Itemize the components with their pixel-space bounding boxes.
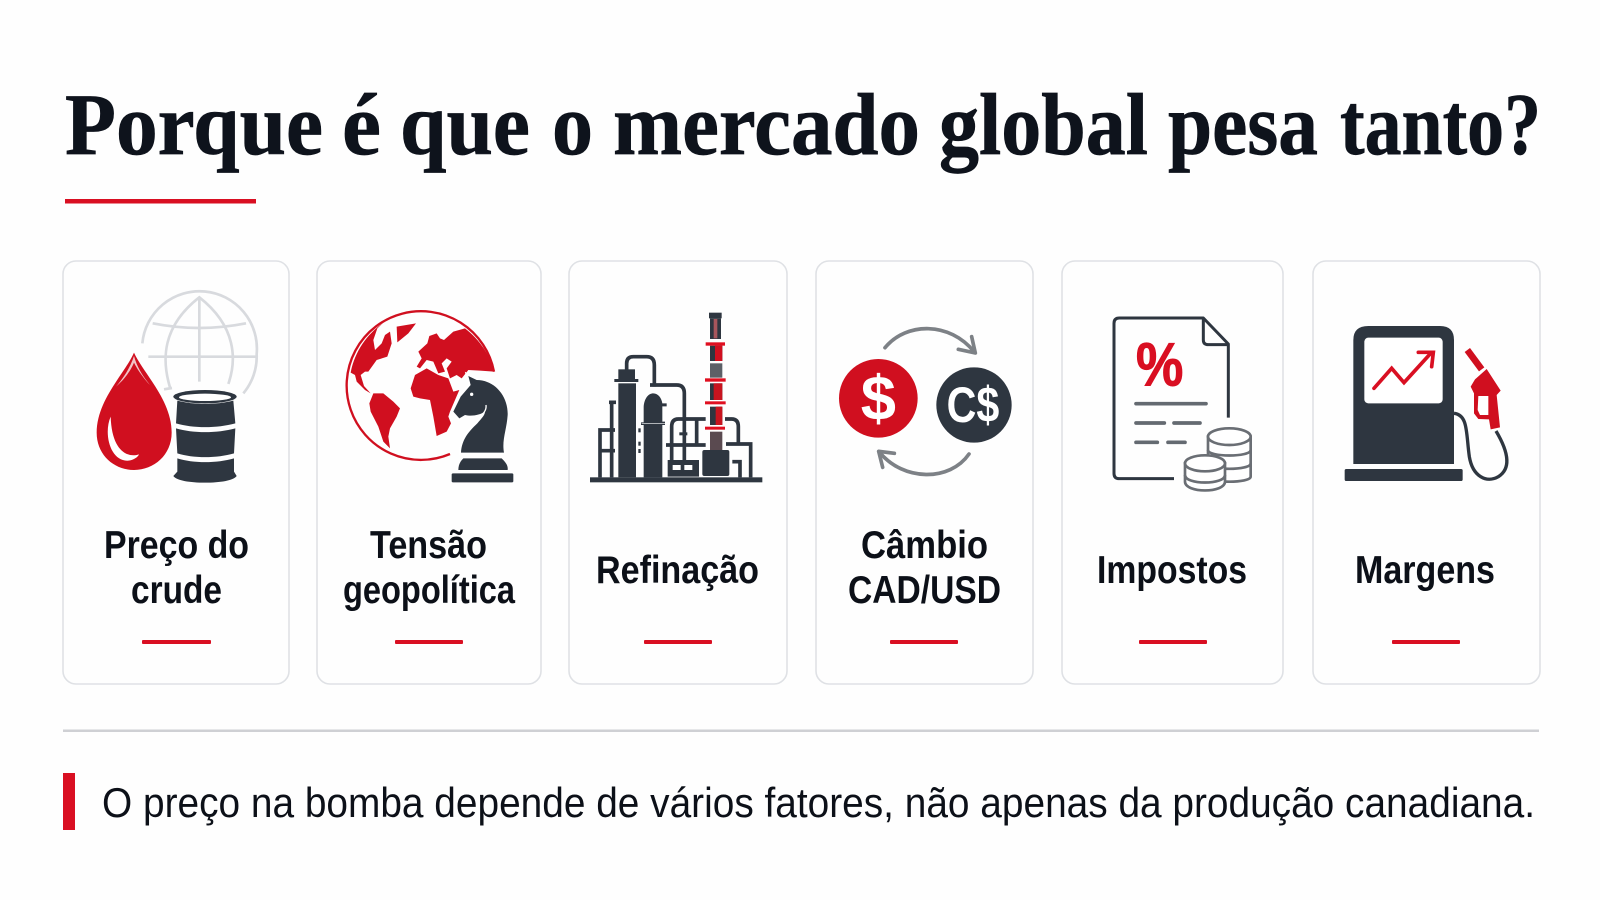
accent dash [395, 640, 463, 644]
title: pesa [1168, 77, 1318, 174]
panel: Impostos [1062, 261, 1283, 684]
panel: Preço do crude [63, 261, 289, 684]
title underline [65, 199, 256, 204]
icon: currency exchange [839, 329, 1012, 475]
panel: Tensão geopolítica [317, 261, 541, 684]
label: Impostos [1097, 549, 1247, 592]
icon: refinery [590, 313, 762, 482]
label: geopolítica [343, 569, 515, 612]
panel: Câmbio CAD/USD [816, 261, 1033, 684]
accent dash [1139, 640, 1207, 644]
label: crude [131, 569, 222, 612]
callout accent bar [63, 773, 75, 830]
panel: Margens [1313, 261, 1540, 684]
label [848, 524, 1001, 612]
label: Câmbio [861, 524, 988, 567]
accent dash [1392, 640, 1460, 644]
title: global [939, 77, 1148, 174]
icon: fuel pump with rising chart [1345, 326, 1507, 481]
title: mercado [613, 77, 920, 174]
divider [63, 730, 1539, 732]
title: tanto? [1340, 77, 1541, 174]
title: que [400, 77, 530, 174]
label: Tensão [370, 524, 487, 567]
title: Porque [65, 77, 323, 174]
title [65, 77, 1541, 174]
icon: world map and chess knight [347, 311, 513, 482]
icon: tax document and coins: % [1136, 331, 1183, 400]
panel: Refinação [569, 261, 787, 684]
accent dash [890, 640, 958, 644]
label [104, 524, 249, 612]
icon: oil drop, barrel and globe [97, 291, 257, 483]
icon: tax document and coins [1114, 318, 1251, 490]
label: Margens [1355, 549, 1495, 592]
title: é [342, 77, 381, 174]
icon: currency exchange: $ [861, 364, 896, 434]
title: o [552, 77, 593, 174]
label: Refinação [596, 549, 759, 592]
label [343, 524, 515, 612]
accent dash [644, 640, 712, 644]
label: Preço do [104, 524, 249, 567]
icon: currency exchange: C$ [947, 377, 999, 433]
label: CAD/USD [848, 569, 1001, 612]
accent dash [142, 640, 211, 644]
